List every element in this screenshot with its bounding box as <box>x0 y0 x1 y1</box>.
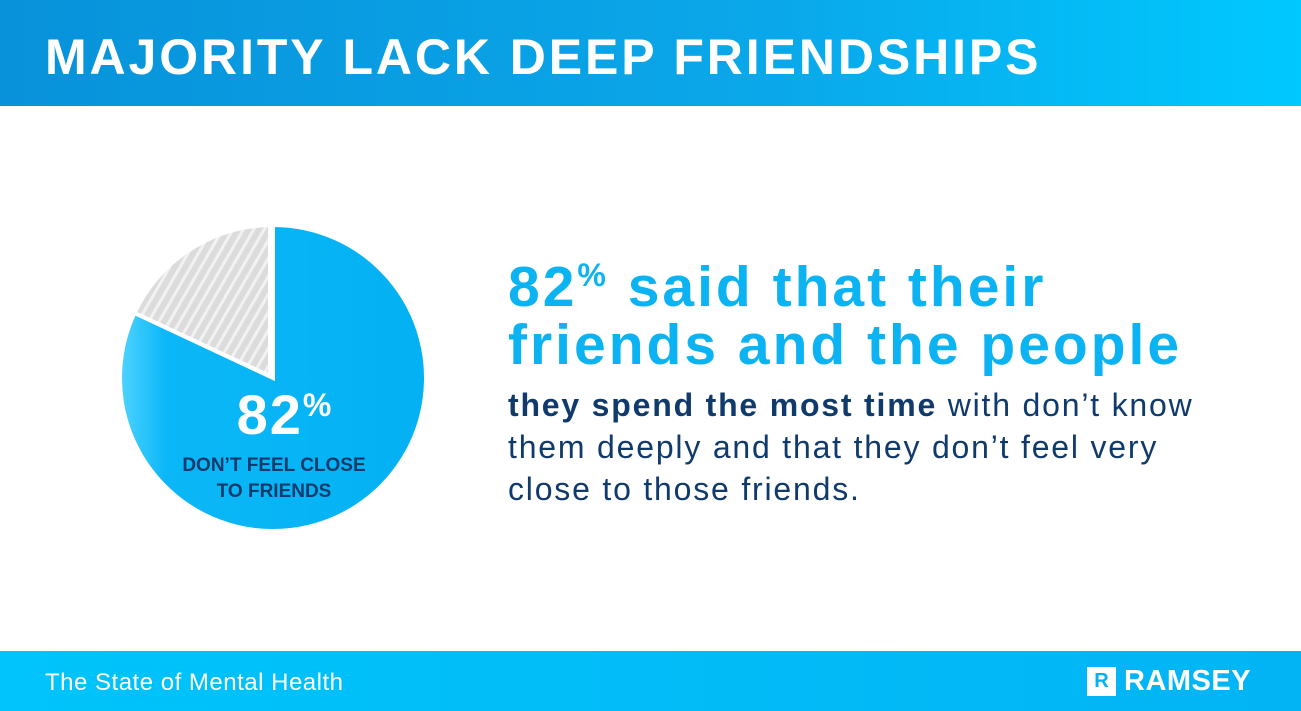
body text <box>508 387 1194 507</box>
body text: close to those friends. <box>508 471 861 507</box>
pie label text: DON’T FEEL CLOSE <box>182 455 366 476</box>
logo: Ramsey: RAMSEY <box>1124 664 1251 696</box>
headline stat: 82% said that their <box>508 255 1046 319</box>
body text: them deeply and that they don’t feel very <box>508 429 1158 465</box>
footer bar <box>0 651 1301 711</box>
pie label text: TO FRIENDS <box>217 481 331 502</box>
pie chart <box>122 227 424 529</box>
headline stat: friends and the people <box>508 313 1182 377</box>
pie label: 82%: 82% <box>237 383 333 446</box>
headline stat <box>508 255 1182 377</box>
title: MAJORITY LACK DEEP FRIENDSHIPS <box>45 29 1041 85</box>
logo: Ramsey: R <box>1094 670 1109 692</box>
header bar <box>0 0 1301 106</box>
footer text: The State of Mental Health <box>45 669 344 696</box>
body text: they spend the most time with don’t know <box>508 387 1194 423</box>
pie label text <box>182 455 366 502</box>
